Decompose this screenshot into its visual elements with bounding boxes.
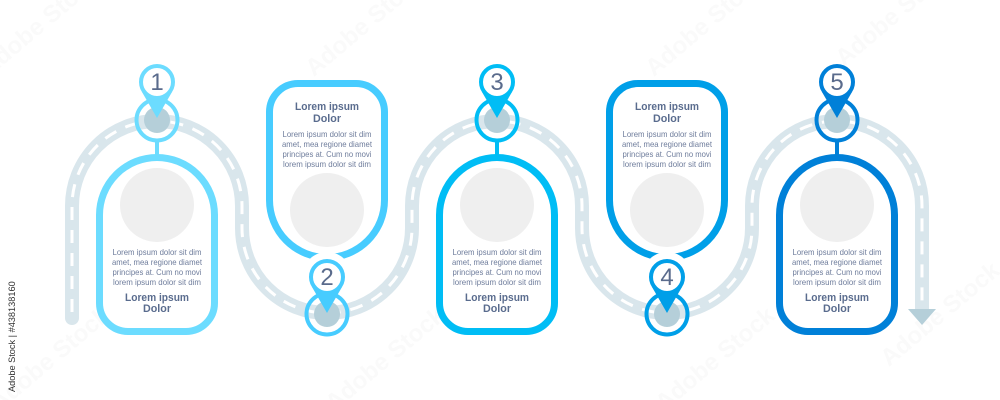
card 1 title: Dolor [143, 303, 172, 315]
card 4 title: Lorem ipsum [635, 101, 699, 113]
card 1 title: Lorem ipsum [125, 292, 189, 304]
pin 5: 5 [830, 69, 844, 96]
card 3 body text [452, 247, 543, 287]
node 5 [816, 100, 858, 140]
connector 5 [835, 141, 839, 155]
stock id label: Adobe Stock | #438138160 [7, 281, 17, 392]
card 2 body text: lorem ipsum dolor sit dim [283, 159, 371, 169]
card 1 outline [100, 157, 214, 332]
road [72, 121, 922, 318]
card 1 body text: principes at. Cum no movi [112, 267, 202, 277]
card 5 outline [780, 157, 894, 332]
step 4 [610, 84, 724, 334]
card 5 body text: principes at. Cum no movi [792, 267, 882, 277]
card 4 title [635, 101, 699, 125]
connector 1 [155, 141, 159, 155]
card 4 body text: lorem ipsum dolor sit dim [623, 159, 711, 169]
card 1 body text [112, 247, 203, 287]
pin 2 [311, 261, 343, 313]
card 1 body text: lorem ipsum dolor sit dim [113, 277, 201, 287]
connector 3 [495, 141, 499, 155]
step 1 [100, 66, 214, 332]
card 1 image placeholder [120, 168, 194, 242]
node 3 [476, 100, 518, 140]
pin 3: 3 [490, 69, 504, 96]
card 2 body text: amet, mea regione diamet [282, 139, 373, 149]
node 2 [306, 294, 348, 334]
card 2 body text: principes at. Cum no movi [282, 149, 372, 159]
card 2 title [295, 101, 359, 125]
card 1 body text: amet, mea regione diamet [112, 257, 203, 267]
road arrowhead [908, 309, 936, 325]
card 3 title: Lorem ipsum [465, 292, 529, 304]
card 4 body text [622, 129, 713, 169]
card 4 body text: Lorem ipsum dolor sit dim [622, 129, 712, 139]
pin 5 [821, 66, 853, 118]
card 2 title: Dolor [313, 113, 342, 125]
card 2 image placeholder [290, 173, 364, 247]
step 5 [780, 66, 894, 332]
pin 3 [481, 66, 513, 118]
card 2 title: Lorem ipsum [295, 101, 359, 113]
card 2 body text [282, 129, 373, 169]
card 5 title: Lorem ipsum [805, 292, 869, 304]
pin 4: 4 [660, 264, 674, 291]
pin 2: 2 [320, 264, 334, 291]
pin halo 4 [642, 252, 692, 302]
pin 4 [651, 261, 683, 313]
card 2 outline [270, 84, 384, 258]
card 3 body text: lorem ipsum dolor sit dim [453, 277, 541, 287]
card 5 body text [792, 247, 883, 287]
node 4 [646, 294, 688, 334]
card 4 outline [610, 84, 724, 258]
card 5 body text: lorem ipsum dolor sit dim [793, 277, 881, 287]
card 5 body text: amet, mea regione diamet [792, 257, 883, 267]
card 3 body text: principes at. Cum no movi [452, 267, 542, 277]
card 1 body text: Lorem ipsum dolor sit dim [112, 247, 202, 257]
card 5 title [805, 292, 869, 315]
card 4 body text: amet, mea regione diamet [622, 139, 713, 149]
card 3 body text: amet, mea regione diamet [452, 257, 543, 267]
card 5 title: Dolor [823, 303, 852, 315]
card 3 image placeholder [460, 168, 534, 242]
card 4 title: Dolor [653, 113, 682, 125]
card 4 body text: principes at. Cum no movi [622, 149, 712, 159]
card 3 outline [440, 158, 554, 332]
card 4 image placeholder [630, 173, 704, 247]
card 5 image placeholder [800, 168, 874, 242]
card 3 title: Dolor [483, 303, 512, 315]
step 3 [440, 66, 554, 332]
card 1 title [125, 292, 189, 315]
card 2 body text: Lorem ipsum dolor sit dim [282, 129, 372, 139]
pin 1: 1 [150, 69, 164, 96]
pin 1 [141, 66, 173, 118]
card 5 body text: Lorem ipsum dolor sit dim [792, 247, 882, 257]
card 3 body text: Lorem ipsum dolor sit dim [452, 247, 542, 257]
node 1 [136, 100, 178, 140]
card 3 title [465, 292, 529, 315]
pin halo 2 [302, 252, 352, 302]
step 2 [270, 84, 384, 334]
